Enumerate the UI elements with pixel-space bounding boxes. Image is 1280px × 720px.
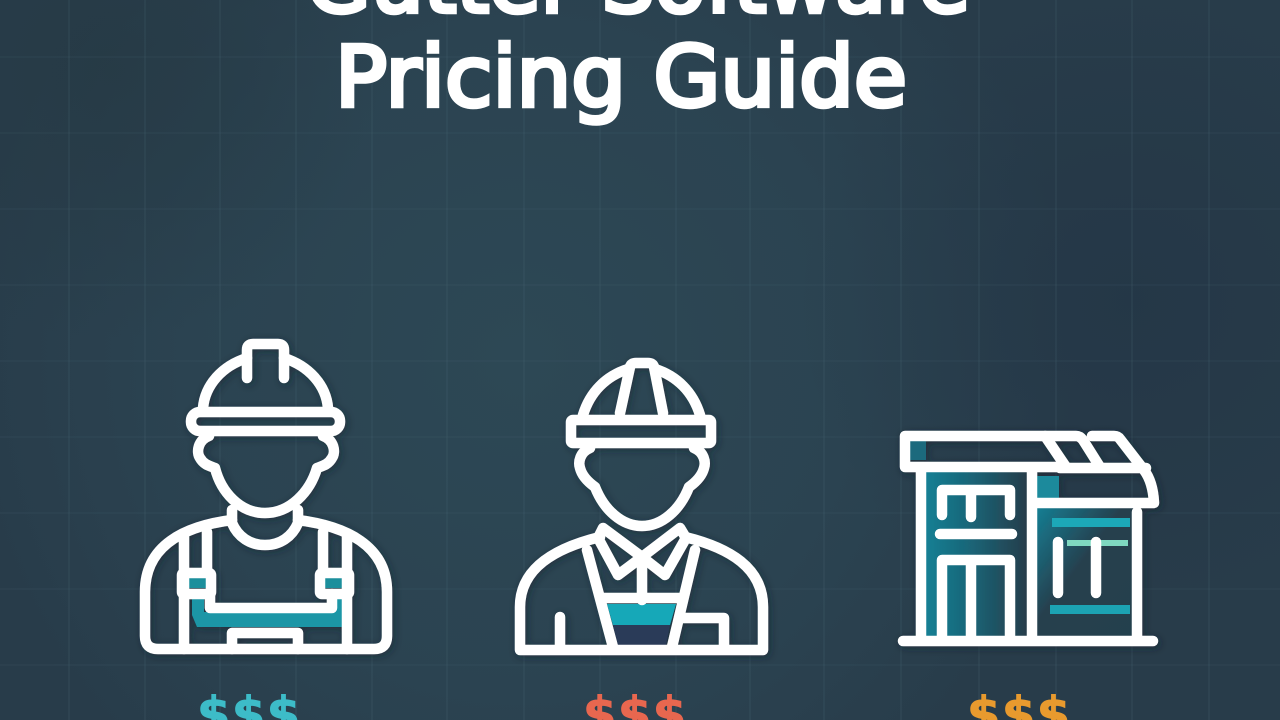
icon: roofer worker with hard hat and overalls [145, 344, 387, 649]
title [306, 0, 970, 126]
icon: storefront building [903, 436, 1154, 641]
title: Pricing Guide [335, 28, 907, 126]
icon: estimator worker with hard hat and vest [520, 363, 763, 650]
